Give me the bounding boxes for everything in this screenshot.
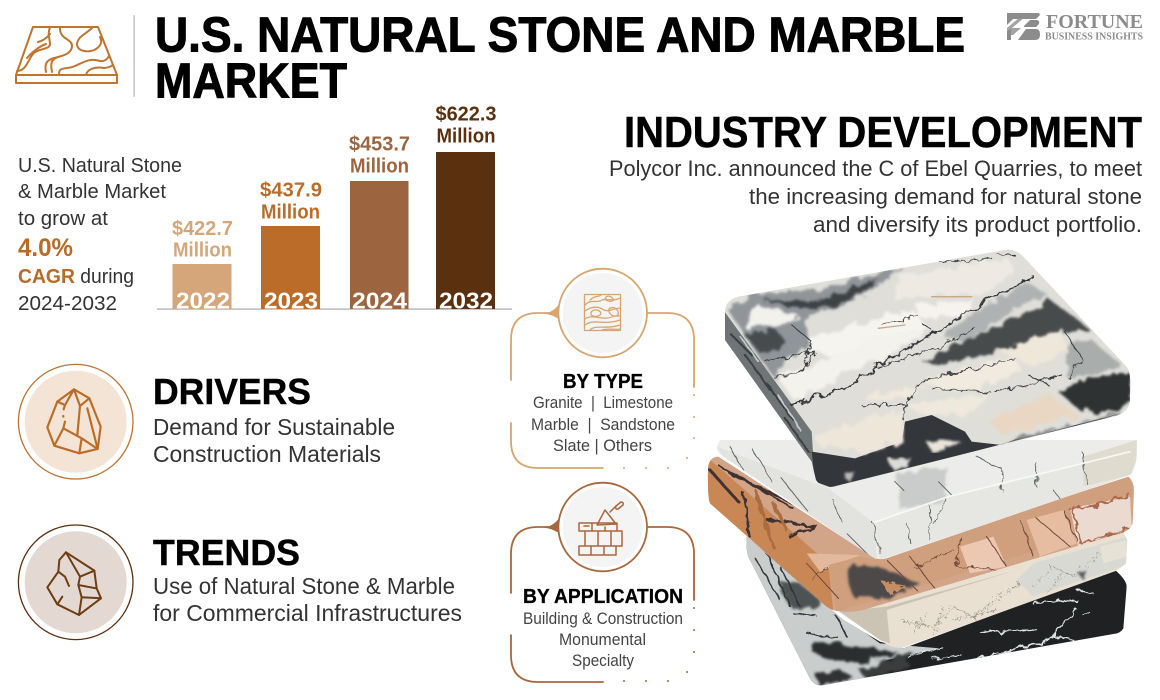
text: application list: Monumental — [559, 631, 646, 649]
panel frame — [511, 527, 694, 682]
panel: by application — [511, 483, 695, 682]
text: industry development detail — [609, 156, 1142, 237]
bar: 2023: Million — [261, 200, 320, 223]
bar: 2032 — [436, 102, 496, 314]
bar: 2024: $453.7 — [349, 132, 410, 156]
text: industry development detail: and diversify its product portfolio. — [813, 212, 1142, 237]
heading: trends: TRENDS — [153, 532, 300, 573]
icon: gem stone in circle — [18, 364, 133, 479]
text: type list: Marble | Sandstone — [531, 416, 675, 434]
text: industry development detail: the increasing demand for natural stone — [749, 184, 1142, 209]
icon: stone pattern in circle — [543, 269, 647, 357]
text: drivers detail — [153, 414, 395, 467]
text: CAGR summary: CAGR during — [18, 266, 134, 288]
bar: 2023: $437.9 — [260, 179, 322, 202]
text: CAGR summary — [18, 155, 182, 315]
panel: trends — [18, 525, 462, 640]
logo: Fortune Business Insights: BUSINESS INSIGHTS — [1045, 32, 1143, 42]
bar: 2032: 2032 — [439, 288, 493, 314]
panel frame — [511, 313, 694, 468]
bar: 2022: $422.7 — [172, 217, 233, 240]
bar: 2022: 2022 — [176, 288, 230, 314]
icon: marble slab logo — [16, 27, 117, 83]
bar: 2022 — [172, 217, 233, 314]
slab: black marble — [743, 533, 1130, 690]
text: trends detail: for Commercial Infrastructures — [153, 600, 462, 626]
bar: 2023: 2023 — [264, 288, 318, 314]
text: trends detail: Use of Natural Stone & Marble — [153, 573, 455, 599]
image: stack of marble slabs — [705, 247, 1143, 690]
header divider — [134, 15, 135, 97]
text: drivers detail: Construction Materials — [153, 441, 381, 467]
text: drivers detail: Demand for Sustainable — [153, 414, 395, 440]
text: CAGR summary: & Marble Market — [18, 181, 166, 203]
logo: Fortune Business Insights: FORTUNE — [1046, 11, 1143, 33]
heading: drivers: DRIVERS — [153, 371, 311, 412]
bar chart: market size — [157, 102, 512, 314]
text: trends detail — [153, 573, 462, 626]
heading: by application: BY APPLICATION — [523, 585, 683, 608]
text: type list: Slate | Others — [553, 437, 652, 455]
decorative dots — [623, 607, 695, 682]
text: industry development detail: Polycor Inc. announced the C of Ebel Quarries, to meet — [609, 156, 1142, 181]
slab: cream marble — [833, 530, 1133, 653]
title: MARKET — [155, 55, 347, 109]
bar: 2032: Million — [436, 124, 496, 147]
slab: veined top marble — [722, 247, 1135, 490]
text: CAGR summary: U.S. Natural Stone — [18, 155, 182, 177]
text: type list: Granite | Limestone — [533, 394, 673, 412]
text: CAGR summary: to grow at — [18, 208, 108, 230]
text: CAGR summary: 4.0% — [18, 234, 73, 262]
text: application list: Building & Construction — [523, 610, 683, 628]
text: type list — [531, 394, 675, 455]
icon: rock in circle — [18, 525, 133, 640]
decorative dots — [623, 394, 695, 469]
title — [155, 9, 965, 109]
icon: brick wall and trowel in circle — [543, 483, 647, 571]
bar: 2022: Million — [173, 239, 232, 262]
logo: Fortune Business Insights — [1007, 11, 1143, 42]
heading: by type: BY TYPE — [563, 370, 643, 393]
bar: 2024: Million — [350, 154, 409, 177]
bar: 2023 — [260, 179, 322, 314]
title: U.S. NATURAL STONE AND MARBLE — [155, 9, 965, 63]
panel: drivers — [18, 364, 395, 479]
bar: 2032: $622.3 — [436, 102, 496, 126]
bar: 2024: 2024 — [352, 288, 407, 314]
text: application list: Specialty — [572, 652, 635, 670]
text: CAGR summary: 2024-2032 — [18, 293, 117, 315]
slab: white marble — [713, 437, 1143, 563]
bar: 2024 — [349, 132, 410, 314]
panel: by type — [511, 269, 695, 469]
slab: orange marble — [705, 453, 1138, 617]
text: application list — [523, 610, 683, 670]
